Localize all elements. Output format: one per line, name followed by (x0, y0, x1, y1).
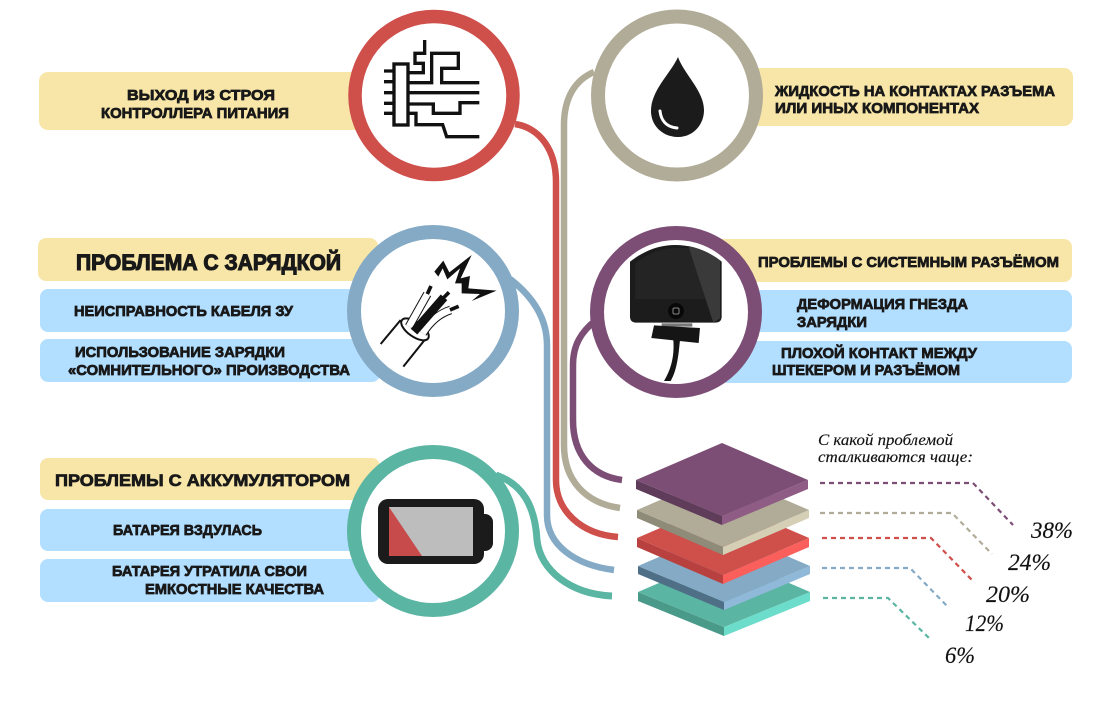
heading: chart question (818, 432, 973, 466)
percentage values: 12% (965, 611, 1004, 636)
panel: connector problems: ШТЕКЕРОМ И РАЗЪЁМОМ (772, 362, 960, 379)
panel: battery problems: ПРОБЛЕМЫ С АККУМУЛЯТОРОМ (55, 471, 350, 490)
layer: teal 6% (638, 555, 810, 636)
icon: beige circle with liquid drop (598, 16, 756, 174)
percentage values: 24% (1008, 550, 1051, 575)
percentage values: 38% (1030, 518, 1073, 543)
panel: liquid label: ИЛИ ИНЫХ КОМПОНЕНТАХ (775, 100, 979, 117)
icon: red circle with circuit (355, 16, 513, 174)
layer: beige 24% (637, 473, 809, 555)
percentage values (945, 518, 1073, 668)
percentage values: 20% (986, 582, 1030, 607)
chart: stacked layers (636, 443, 810, 636)
panel: charging problems: НЕИСПРАВНОСТЬ КАБЕЛЯ ЗУ (74, 303, 294, 320)
layer: red 20% (637, 501, 809, 584)
panel: controller failure label: ВЫХОД ИЗ СТРОЯ (127, 87, 275, 104)
panel: charging problems: ИСПОЛЬЗОВАНИЕ ЗАРЯДКИ (75, 344, 285, 361)
heading: chart question: сталкиваются чаще: (818, 449, 973, 466)
panel: connector problems: ПРОБЛЕМЫ С СИСТЕМНЫМ РАЗЪЁМОМ (758, 254, 1059, 271)
panel: connector problems: ПЛОХОЙ КОНТАКТ МЕЖДУ (781, 344, 978, 362)
icon: blue circle with broken cable (354, 232, 512, 390)
connector curves (496, 72, 622, 596)
panel: battery problems (40, 458, 380, 602)
heading: chart question: С какой проблемой (818, 432, 953, 449)
panel: charging problems: «СОМНИТЕЛЬНОГО» ПРОИЗВОДСТВА (68, 362, 350, 379)
panel: charging problems: ПРОБЛЕМА С ЗАРЯДКОЙ (76, 250, 341, 275)
icon: teal circle with low battery (354, 452, 512, 610)
panel: connector problems: ЗАРЯДКИ (797, 314, 867, 331)
panel: liquid label (720, 68, 1073, 126)
panel: liquid label: ЖИДКОСТЬ НА КОНТАКТАХ РАЗЪЕМА (774, 83, 1055, 100)
panel: connector problems (710, 239, 1072, 383)
panel: controller failure label: КОНТРОЛЛЕРА ПИТАНИЯ (101, 105, 289, 122)
panel: controller failure label (39, 72, 379, 130)
panel: battery problems: БАТАРЕЯ УТРАТИЛА СВОИ (112, 563, 307, 580)
panel: charging problems (38, 238, 380, 382)
layer: blue 12% (638, 529, 810, 610)
icon: purple circle with phone connector (597, 233, 755, 391)
percentage values: 6% (945, 643, 975, 668)
panel: connector problems: ДЕФОРМАЦИЯ ГНЕЗДА (797, 296, 968, 313)
panel: battery problems: БАТАРЕЯ ВЗДУЛАСЬ (113, 522, 262, 539)
panel: battery problems: ЕМКОСТНЫЕ КАЧЕСТВА (145, 581, 324, 598)
layer: purple 38% (636, 443, 808, 525)
dashed leader lines (820, 483, 1013, 638)
